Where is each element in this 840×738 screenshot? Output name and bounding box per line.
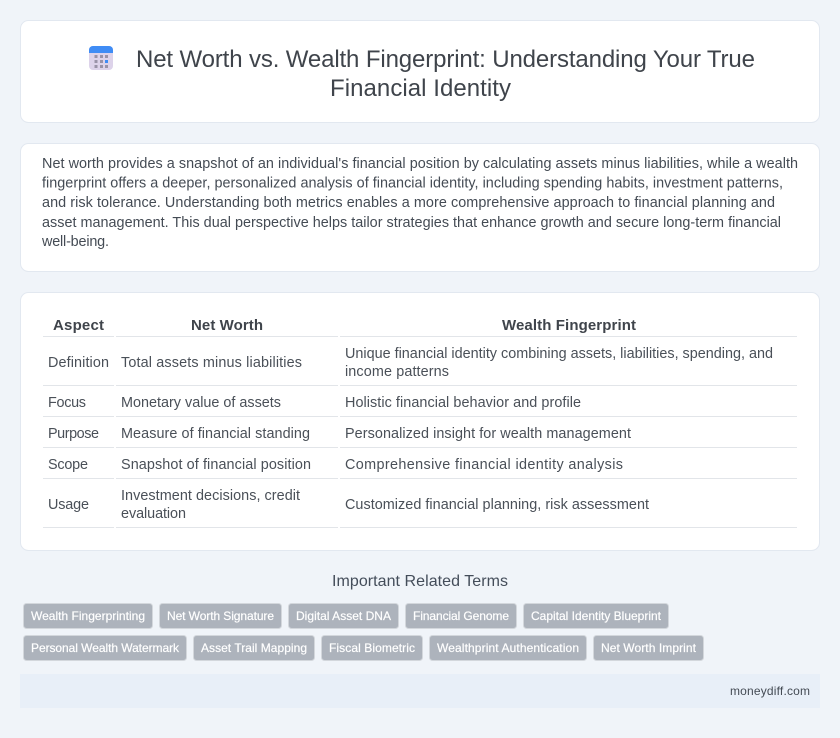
heading: related terms: Important Related Terms — [332, 573, 508, 590]
title: Financial Identity — [330, 75, 511, 102]
intro paragraph: Net worth provides a snapshot of an individual's financial position by calculating assets minus liabilities, while a wealth — [42, 156, 798, 172]
related term tags: Fiscal Biometric — [329, 641, 415, 655]
panel: title card — [20, 20, 820, 122]
row: definition: income patterns — [345, 364, 449, 380]
related term tags: Net Worth Signature — [167, 609, 274, 623]
title: Net Worth vs. Wealth Fingerprint: Understanding Your True — [136, 46, 755, 73]
row: scope: Comprehensive financial identity analysis — [345, 457, 623, 473]
row: focus: Focus — [48, 395, 86, 411]
related term tags: Wealthprint Authentication — [437, 641, 579, 655]
row: usage: evaluation — [121, 506, 186, 522]
intro paragraph — [41, 156, 798, 250]
row: purpose: Purpose — [48, 426, 99, 442]
row: focus — [48, 395, 581, 411]
row: usage: Customized financial planning, risk assessment — [345, 497, 649, 513]
row: purpose: Personalized insight for wealth management — [345, 426, 631, 442]
intro paragraph: fingerprint offers a deeper, personalized analysis of financial identity, including spending habits, investment patterns, — [42, 176, 783, 192]
title — [136, 46, 755, 102]
row: usage: Usage — [48, 497, 89, 513]
row: focus: Monetary value of assets — [121, 395, 281, 411]
row: definition: Unique financial identity combining assets, liabilities, spending, and — [345, 346, 773, 362]
related term tags: Net Worth Imprint — [601, 641, 697, 655]
related term tags: Personal Wealth Watermark — [31, 641, 180, 655]
footer: moneydiff.com — [730, 684, 810, 698]
panel: comparison table — [20, 292, 820, 550]
row: scope: Snapshot of financial position — [121, 457, 311, 473]
related term tags: Financial Genome — [413, 609, 509, 623]
related term tags: Capital Identity Blueprint — [531, 609, 662, 623]
row: purpose: Measure of financial standing — [121, 426, 310, 442]
panel: intro text — [20, 144, 820, 272]
row: usage: Investment decisions, credit — [121, 488, 300, 504]
row: definition: Definition — [48, 355, 109, 371]
row: scope: Scope — [48, 457, 88, 473]
row: usage — [48, 488, 649, 522]
related term tags: Asset Trail Mapping — [201, 641, 307, 655]
row: scope — [48, 457, 623, 473]
row: focus: Holistic financial behavior and profile — [345, 395, 581, 411]
row: purpose — [48, 426, 631, 442]
intro paragraph: and risk tolerance. Understanding both metrics enables a more comprehensive approach to financial planning and — [42, 195, 775, 211]
intro paragraph: well-being. — [41, 234, 109, 250]
related term tags: Wealth Fingerprinting — [31, 609, 145, 623]
related term tags — [24, 604, 704, 660]
row: definition: Total assets minus liabilities — [121, 355, 302, 371]
table header: Wealth Fingerprint — [502, 317, 636, 334]
row: definition — [48, 346, 773, 380]
related term tags: Digital Asset DNA — [296, 609, 391, 623]
icon: calendar — [89, 46, 113, 70]
table header — [53, 317, 636, 334]
table header: Net Worth — [191, 317, 263, 334]
table header: Aspect — [53, 317, 104, 334]
intro paragraph: asset management. This dual perspective helps tailor strategies that enhance growth and secure long-term financial — [42, 215, 781, 231]
footer — [20, 674, 820, 708]
